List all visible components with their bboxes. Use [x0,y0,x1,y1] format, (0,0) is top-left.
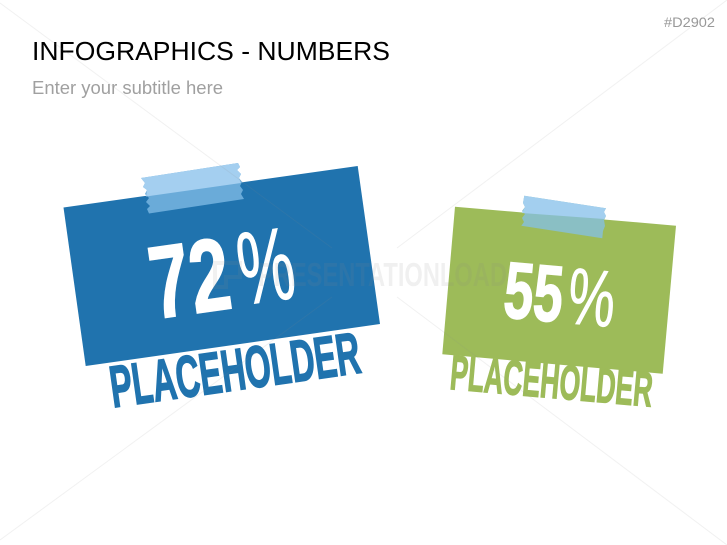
label PLACEHOLDER blue: PLACEHOLDER [106,320,364,420]
blue note tape upper part [141,163,241,196]
panel: blue note 72% [64,163,380,420]
title: INFOGRAPHICS - NUMBERS [32,36,390,66]
value 55% [501,245,619,344]
percent sign: % [565,251,619,344]
watermark text: PRESENTATIONLOAD [258,256,507,293]
green note paper [442,207,676,374]
icon: green note tape [521,196,606,238]
blue note paper [64,166,380,366]
percent sign: % [230,205,302,327]
value 72% [142,205,302,341]
icon: blue note tape [141,163,244,214]
watermark logo [215,263,240,287]
panel: green note 55% [442,196,676,418]
digits 72: 72 [142,216,237,341]
digits 55: 55 [501,245,567,339]
watermark [215,256,507,293]
document code: #D2902 [664,14,715,30]
subtitle: Enter your subtitle here [32,78,223,98]
green note tape upper part [522,196,606,219]
